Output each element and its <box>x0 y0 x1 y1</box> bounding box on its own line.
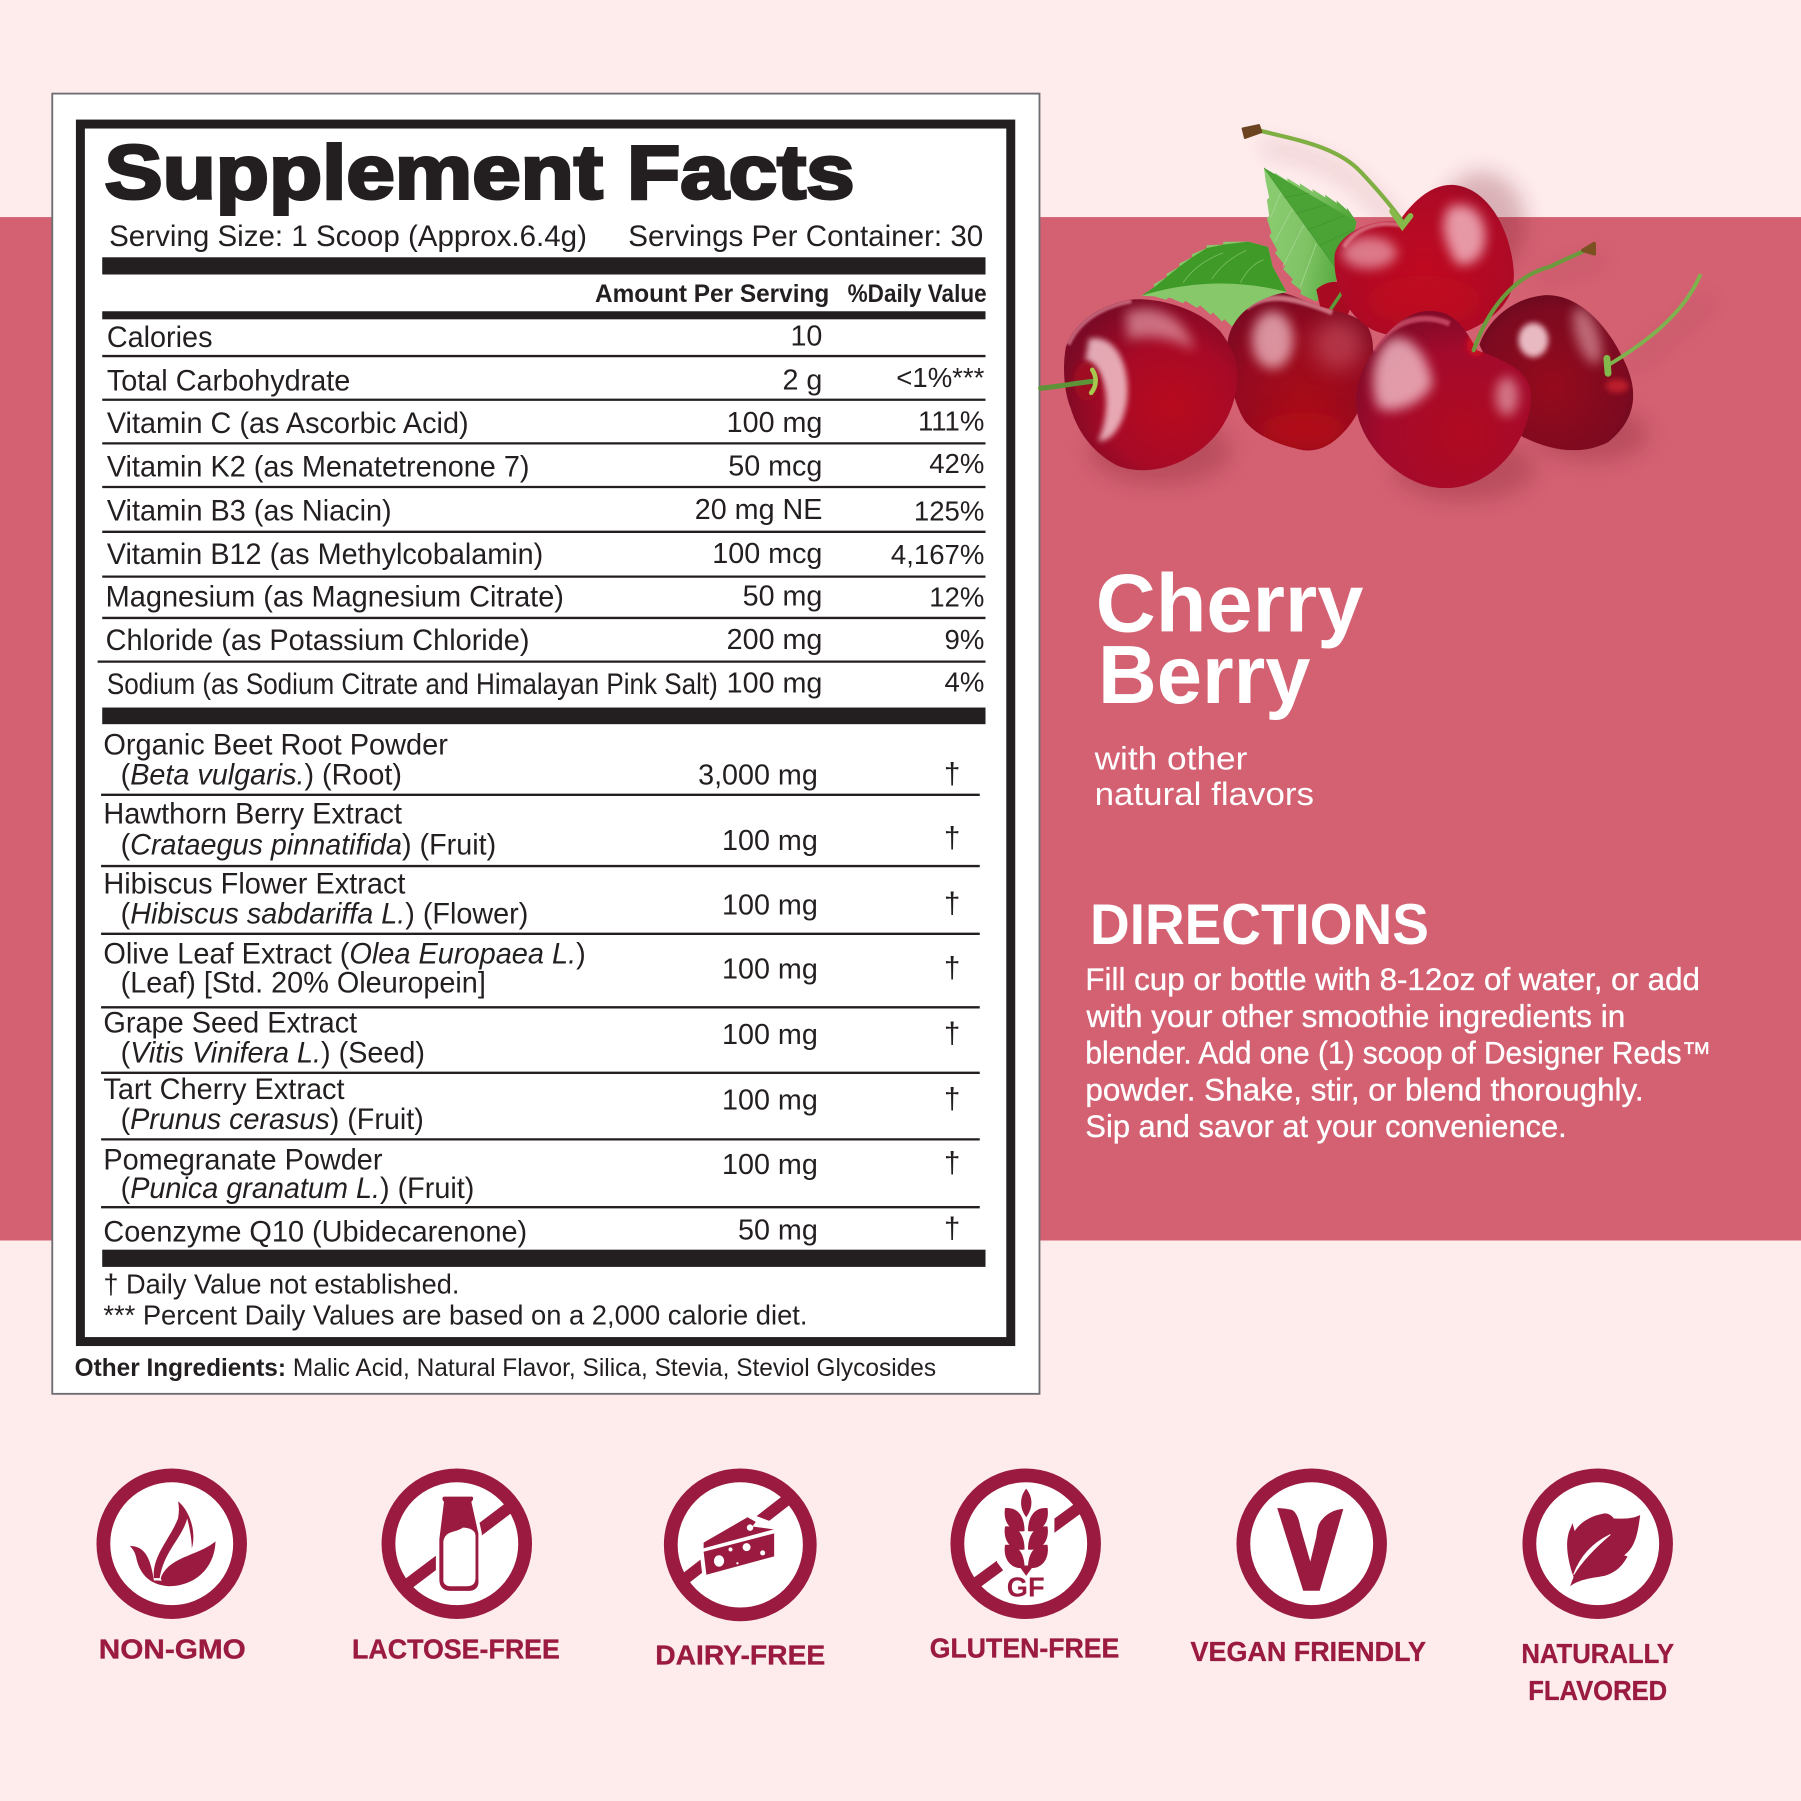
botanical ingredients table: Grape Seed Extract <box>103 1007 357 1040</box>
badge: Lactose-free: LACTOSE-FREE <box>352 1634 560 1665</box>
botanical ingredients table: † <box>944 757 960 790</box>
botanical ingredients table: 100 mg <box>722 889 818 921</box>
vitamins and minerals table: 9% <box>945 624 984 655</box>
vitamins and minerals table: 200 mg <box>727 624 822 656</box>
botanical ingredients table: 100 mg <box>722 954 818 986</box>
botanical ingredients table: (Beta vulgaris.) (Root) <box>121 758 402 791</box>
cherry: right <box>1480 295 1634 450</box>
badge: Gluten-free <box>930 1475 1119 1663</box>
badge: Dairy-free <box>655 1475 825 1670</box>
botanical ingredients table: † <box>944 822 960 855</box>
botanical ingredients table: Tart Cherry Extract <box>103 1073 345 1106</box>
vitamins and minerals table: 50 mcg <box>728 451 822 483</box>
product name: Cherry Berry: Berry <box>1098 628 1311 721</box>
badge: Non-GMO: NON-GMO <box>99 1634 246 1665</box>
cherry: front <box>1356 310 1531 488</box>
vitamins and minerals table: 100 mg <box>727 407 822 439</box>
rose colour band <box>0 217 1801 1240</box>
badge: Naturally flavored <box>1521 1475 1674 1706</box>
botanical ingredients table: Organic Beet Root Powder <box>103 729 448 762</box>
vitamins and minerals table: <1%*** <box>896 362 985 393</box>
vitamins and minerals table: 10 <box>790 321 822 353</box>
vitamins and minerals table: Vitamin C (as Ascorbic Acid) <box>107 407 469 440</box>
vitamins and minerals table: Chloride (as Potassium Chloride) <box>106 624 530 657</box>
other ingredients: Malic Acid, Natural Flavor, Silica, Stevia, Steviol Glycosides <box>293 1355 936 1382</box>
vitamins and minerals table: 100 mcg <box>712 538 822 570</box>
serving information: Serving Size: 1 Scoop (Approx.6.4g) <box>109 220 587 253</box>
botanical ingredients table: † <box>944 1212 960 1245</box>
botanical ingredients table: 100 mg <box>722 1149 818 1181</box>
directions text: blender. Add one (1) scoop of Designer Reds™ <box>1085 1036 1711 1071</box>
botanical ingredients table: 100 mg <box>722 825 818 857</box>
product name: Cherry Berry: Cherry <box>1096 557 1363 650</box>
botanical ingredients table: † <box>944 1017 960 1050</box>
footnotes: † Daily Value not established. <box>103 1268 459 1299</box>
vitamins and minerals table: Vitamin B3 (as Niacin) <box>107 494 392 527</box>
serving information: Servings Per Container: 30 <box>628 220 983 253</box>
botanical ingredients table: (Leaf) [Std. 20% Oleuropein] <box>121 966 486 999</box>
vitamins and minerals table: 4% <box>945 666 984 697</box>
badge: Vegan friendly: VEGAN FRIENDLY <box>1191 1636 1426 1667</box>
vitamins and minerals table: 50 mg <box>743 580 822 612</box>
botanical ingredients table: 50 mg <box>738 1214 818 1246</box>
icon: letter V <box>1277 1508 1343 1591</box>
directions text: Fill cup or bottle with 8-12oz of water, or add <box>1085 962 1700 997</box>
botanical ingredients table: (Vitis Vinifera L.) (Seed) <box>121 1036 425 1069</box>
vitamins and minerals table: Vitamin K2 (as Menatetrenone 7) <box>107 451 530 484</box>
vitamins and minerals table: Total Carbohydrate <box>107 365 350 398</box>
cherry: left <box>1064 299 1238 470</box>
serving information <box>109 220 983 253</box>
botanical ingredients table: † <box>944 1082 960 1115</box>
directions text: with your other smoothie ingredients in <box>1086 999 1625 1034</box>
botanical ingredients table: 100 mg <box>722 1019 818 1051</box>
vitamins and minerals table: Magnesium (as Magnesium Citrate) <box>106 580 564 613</box>
badge: Vegan friendly <box>1191 1475 1426 1667</box>
leaf: upright <box>1264 168 1356 302</box>
vitamins and minerals table: Vitamin B12 (as Methylcobalamin) <box>107 538 543 571</box>
illustration: cherries with leaves <box>1041 125 1711 501</box>
vitamins and minerals table: 20 mg NE <box>695 494 822 526</box>
footnotes: *** Percent Daily Values are based on a 2,000 calorie diet. <box>103 1299 807 1330</box>
vitamins and minerals table: Calories <box>107 321 212 354</box>
icon: crossed wheat with GF <box>972 1489 1083 1603</box>
botanical ingredients table: Hawthorn Berry Extract <box>103 798 402 831</box>
botanical ingredients table: Hibiscus Flower Extract <box>103 868 405 901</box>
botanical ingredients table: (Punica granatum L.) (Fruit) <box>121 1172 474 1205</box>
icon: crossed wheat with GF: GF <box>1007 1572 1045 1603</box>
directions text <box>1085 962 1711 1144</box>
cherry: middle <box>1228 293 1374 450</box>
botanical ingredients table: 100 mg <box>722 1085 818 1117</box>
column headers: Amount Per Serving <box>595 281 829 308</box>
product name: Cherry Berry <box>1096 557 1363 721</box>
badge: Gluten-free: GLUTEN-FREE <box>930 1632 1119 1663</box>
badge: Lactose-free <box>352 1475 560 1665</box>
botanical ingredients table: Pomegranate Powder <box>103 1143 383 1176</box>
icon: leaf <box>1567 1513 1640 1586</box>
heading: Directions: DIRECTIONS <box>1090 893 1429 957</box>
botanical ingredients table: † <box>944 887 960 920</box>
stems <box>1041 125 1700 393</box>
column headers: %Daily Value <box>848 281 987 308</box>
botanical ingredients table: Olive Leaf Extract (Olea Europaea L.) <box>103 938 586 971</box>
badge: Non-GMO <box>99 1475 246 1665</box>
botanical ingredients table <box>101 729 980 1249</box>
botanical ingredients table: (Crataegus pinnatifida) (Fruit) <box>121 829 496 862</box>
leaf: left <box>1142 242 1286 326</box>
vitamins and minerals table <box>98 321 985 701</box>
other ingredients: Other Ingredients: <box>75 1355 286 1382</box>
botanical ingredients table: (Hibiscus sabdariffa L.) (Flower) <box>121 897 528 930</box>
cherry: top <box>1334 184 1514 334</box>
botanical ingredients table: † <box>944 951 960 984</box>
botanical ingredients table: 3,000 mg <box>698 759 818 791</box>
vitamins and minerals table: 125% <box>914 495 984 526</box>
botanical ingredients table: † <box>944 1147 960 1180</box>
badge: Naturally flavored: FLAVORED <box>1528 1675 1667 1706</box>
small cherry behind <box>1316 282 1353 319</box>
directions text: Sip and savor at your convenience. <box>1085 1109 1567 1144</box>
vitamins and minerals table: 100 mg <box>727 668 822 700</box>
vitamins and minerals table: 42% <box>929 448 984 479</box>
badge: Naturally flavored: NATURALLY <box>1521 1638 1674 1669</box>
flavor note: with other <box>1094 741 1248 777</box>
cherry shadows <box>1089 147 1711 501</box>
icon: crossed milk bottle <box>402 1495 515 1593</box>
vitamins and minerals table: 12% <box>929 581 984 612</box>
vitamins and minerals table: 2 g <box>782 364 822 396</box>
column headers <box>595 281 987 308</box>
icon: plant <box>130 1501 215 1586</box>
vitamins and minerals table: Sodium (as Sodium Citrate and Himalayan Pink Salt) <box>107 668 718 701</box>
directions text: powder. Shake, stir, or blend thoroughly. <box>1085 1072 1644 1107</box>
panel: supplement facts label <box>52 94 1039 1394</box>
botanical ingredients table: (Prunus cerasus) (Fruit) <box>121 1103 424 1136</box>
footnotes <box>103 1268 807 1330</box>
botanical ingredients table: Coenzyme Q10 (Ubidecarenone) <box>103 1216 527 1249</box>
heading: Supplement Facts: Supplement Facts <box>105 131 855 216</box>
flavor note <box>1094 741 1314 812</box>
vitamins and minerals table: 111% <box>918 406 984 437</box>
vitamins and minerals table: 4,167% <box>891 539 984 570</box>
badge: Dairy-free: DAIRY-FREE <box>655 1639 825 1670</box>
flavor note: natural flavors <box>1095 776 1314 812</box>
icon: crossed cheese <box>680 1495 793 1583</box>
